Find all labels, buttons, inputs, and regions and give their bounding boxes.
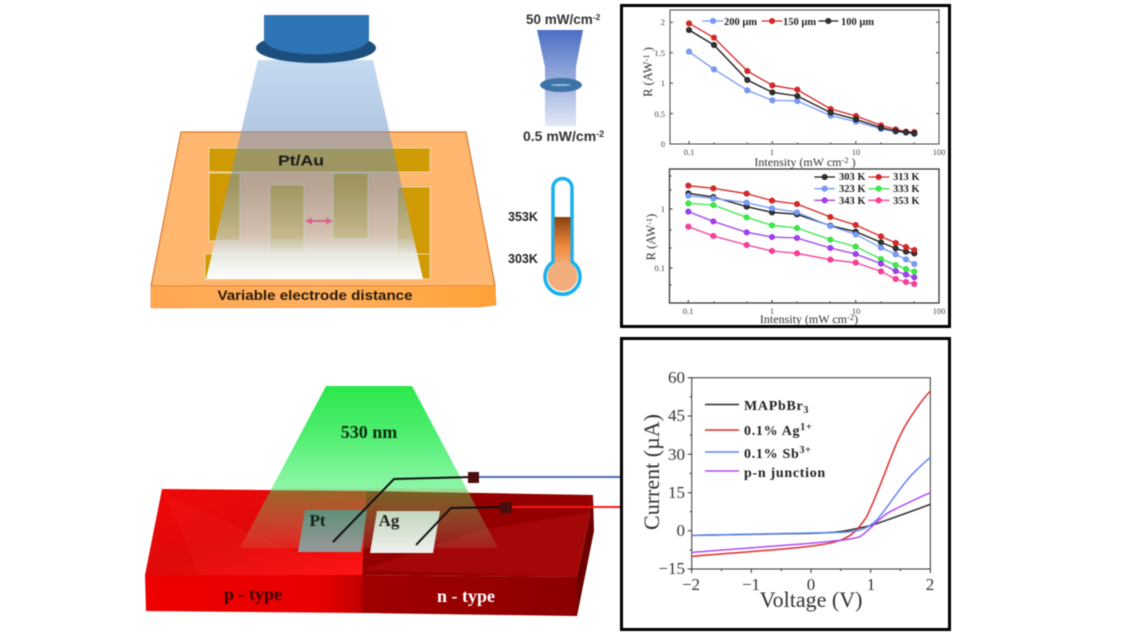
- chart: responsivity vs intensity for temperature: 100: [933, 306, 945, 316]
- chart: responsivity vs intensity for electrode distance: 10: [852, 147, 860, 157]
- y axis title: Current (µA): [639, 414, 664, 530]
- panel border: [622, 338, 950, 630]
- chart: responsivity vs intensity for temperature: 343 K: [839, 196, 866, 207]
- panel: responsivity charts: [622, 6, 950, 326]
- blue lead wire: [479, 476, 620, 478]
- chart: responsivity vs intensity for electrode distance: 0.5: [654, 109, 665, 119]
- legend: MAPbBr: [744, 399, 803, 414]
- chart: responsivity vs intensity for temperature: [644, 169, 945, 326]
- legend: p-n junction: [744, 466, 826, 481]
- Pt probe contact: [468, 472, 479, 483]
- label: Pt: Pt: [309, 511, 326, 530]
- chart: responsivity vs intensity for electrode distance: 1.5: [654, 48, 665, 58]
- label: 50 mW/cm-2: 50 mW/cm: [526, 12, 593, 27]
- block: right side face: [577, 495, 594, 616]
- block: n-type front face: [362, 575, 577, 616]
- chart: responsivity vs intensity for temperature: 333 K: [893, 184, 920, 195]
- chart: responsivity vs intensity for electrode distance: 1: [770, 147, 774, 157]
- label: 353K: 353K: [508, 210, 538, 224]
- y axis tick labels: 45: [668, 406, 685, 425]
- Pt probe wire: [333, 477, 473, 542]
- label: p-type: p - type: [224, 584, 282, 604]
- chart: responsivity vs intensity for temperature: Intensity (mW cm: [760, 312, 847, 326]
- x axis title: Voltage (V): [760, 587, 862, 612]
- panel: p-n junction device: [145, 386, 620, 616]
- interdigitated Pt/Au electrodes: [205, 148, 430, 279]
- panel border: [622, 6, 950, 326]
- label: 0.5 mW/cm-2: -2: [596, 129, 604, 139]
- x axis tick labels: −1: [742, 575, 760, 594]
- y axis tick labels: 30: [668, 445, 685, 464]
- label: n-type: n - type: [437, 586, 495, 606]
- block: p-type front face: [145, 575, 362, 613]
- chart: responsivity vs intensity for electrode distance: ): [641, 47, 655, 54]
- illumination beam: [206, 60, 423, 279]
- chart: responsivity vs intensity for temperature: 10: [852, 306, 860, 316]
- chart: responsivity vs intensity for temperature: 0.1: [654, 263, 665, 273]
- chart: responsivity vs intensity for electrode distance: -2: [842, 155, 849, 165]
- chart: responsivity vs intensity for electrode distance: [641, 10, 945, 169]
- x axis tick labels: 2: [926, 575, 934, 594]
- y axis tick labels: [658, 368, 685, 578]
- chart: responsivity vs intensity for temperature: -1: [644, 218, 654, 225]
- label: Ag: Ag: [379, 511, 400, 530]
- I-V curves: [692, 391, 930, 556]
- x axis tick labels: 1: [867, 575, 875, 594]
- x axis tick labels: −2: [682, 575, 700, 594]
- y axis tick labels: 60: [668, 368, 685, 387]
- legend: 0.1% Sb: [744, 447, 799, 462]
- chart: responsivity vs intensity for temperature: ): [644, 214, 658, 218]
- y axis tick labels: 15: [668, 483, 685, 502]
- chart: responsivity vs intensity for electrode distance: 200 µm: [724, 17, 757, 28]
- panel: intensity and temperature ranges: [508, 12, 604, 294]
- I-V axes: [688, 378, 930, 573]
- chart: responsivity vs intensity for temperature: 353 K: [893, 196, 920, 207]
- chart: responsivity vs intensity for temperature: R (AW: [644, 225, 658, 260]
- arrow: electrode spacing: [305, 218, 333, 224]
- Ag probe wire: [416, 507, 506, 545]
- Ag electrode: [370, 511, 440, 553]
- substrate: [151, 132, 496, 308]
- chart: responsivity vs intensity for electrode distance: 2: [661, 17, 665, 27]
- legend: 3+: [799, 445, 812, 456]
- Ag probe contact: [500, 502, 512, 513]
- chart: responsivity vs intensity for electrode distance: ): [849, 155, 856, 169]
- label: variable electrode distance: Variable electrode distance: [218, 287, 413, 303]
- label: 530 nm: 530 nm: [341, 422, 397, 442]
- Pt electrode: [298, 510, 367, 552]
- icon: light beam through lens: [537, 30, 583, 126]
- chart: responsivity vs intensity for electrode distance: Intensity (mW cm: [754, 155, 842, 169]
- chart: responsivity vs intensity for temperature: 303 K: [839, 172, 866, 183]
- chart: responsivity vs intensity for temperature: -2: [847, 312, 854, 322]
- chart: responsivity vs intensity for temperature: 1: [661, 204, 665, 214]
- chart: responsivity vs intensity for electrode distance: 100: [933, 147, 945, 157]
- chart: responsivity vs intensity for electrode distance: 150 µm: [783, 17, 816, 28]
- legend: 0.1% Ag: [744, 424, 800, 439]
- legend: 1+: [800, 422, 812, 433]
- green light cone: [240, 386, 498, 548]
- chart: responsivity vs intensity for electrode distance: 100 µm: [841, 17, 874, 28]
- chart: responsivity vs intensity for electrode distance: -1: [641, 54, 651, 61]
- chart: responsivity vs intensity for temperature: 0.1: [683, 306, 693, 316]
- chart: responsivity vs intensity for electrode distance: 1: [661, 78, 665, 88]
- y axis tick labels: −15: [658, 559, 685, 578]
- block: surface streaks: [165, 495, 593, 577]
- x axis tick labels: 0: [807, 575, 815, 594]
- chart: responsivity vs intensity for electrode distance: R (AW: [641, 61, 655, 97]
- label: 0.5 mW/cm-2: 0.5 mW/cm: [523, 128, 596, 144]
- block: n-type top face: [362, 491, 593, 577]
- x axis tick labels: [682, 575, 934, 594]
- lamp: [256, 15, 376, 63]
- label: 303K: 303K: [508, 252, 538, 266]
- block: p-type top face: [145, 489, 366, 575]
- icon: thermometer: [545, 178, 580, 294]
- chart: responsivity vs intensity for temperature: ): [854, 312, 858, 326]
- chart: responsivity vs intensity for electrode distance: 0: [661, 139, 665, 149]
- legend: 3: [803, 405, 809, 416]
- panel: variable electrode distance device: [151, 15, 496, 308]
- legend: [705, 399, 826, 481]
- red lead wire: [512, 506, 620, 508]
- chart: responsivity vs intensity for temperature: 313 K: [893, 172, 920, 183]
- label: 50 mW/cm-2: -2: [593, 12, 601, 22]
- panel: current-voltage chart: [622, 338, 950, 630]
- chart: responsivity vs intensity for temperature: 1: [770, 306, 774, 316]
- label: Pt/Au: Pt/Au: [278, 152, 324, 170]
- y axis tick labels: 0: [676, 521, 685, 540]
- chart: responsivity vs intensity for temperature: 323 K: [839, 184, 866, 195]
- chart: responsivity vs intensity for electrode distance: 0.1: [684, 147, 694, 157]
